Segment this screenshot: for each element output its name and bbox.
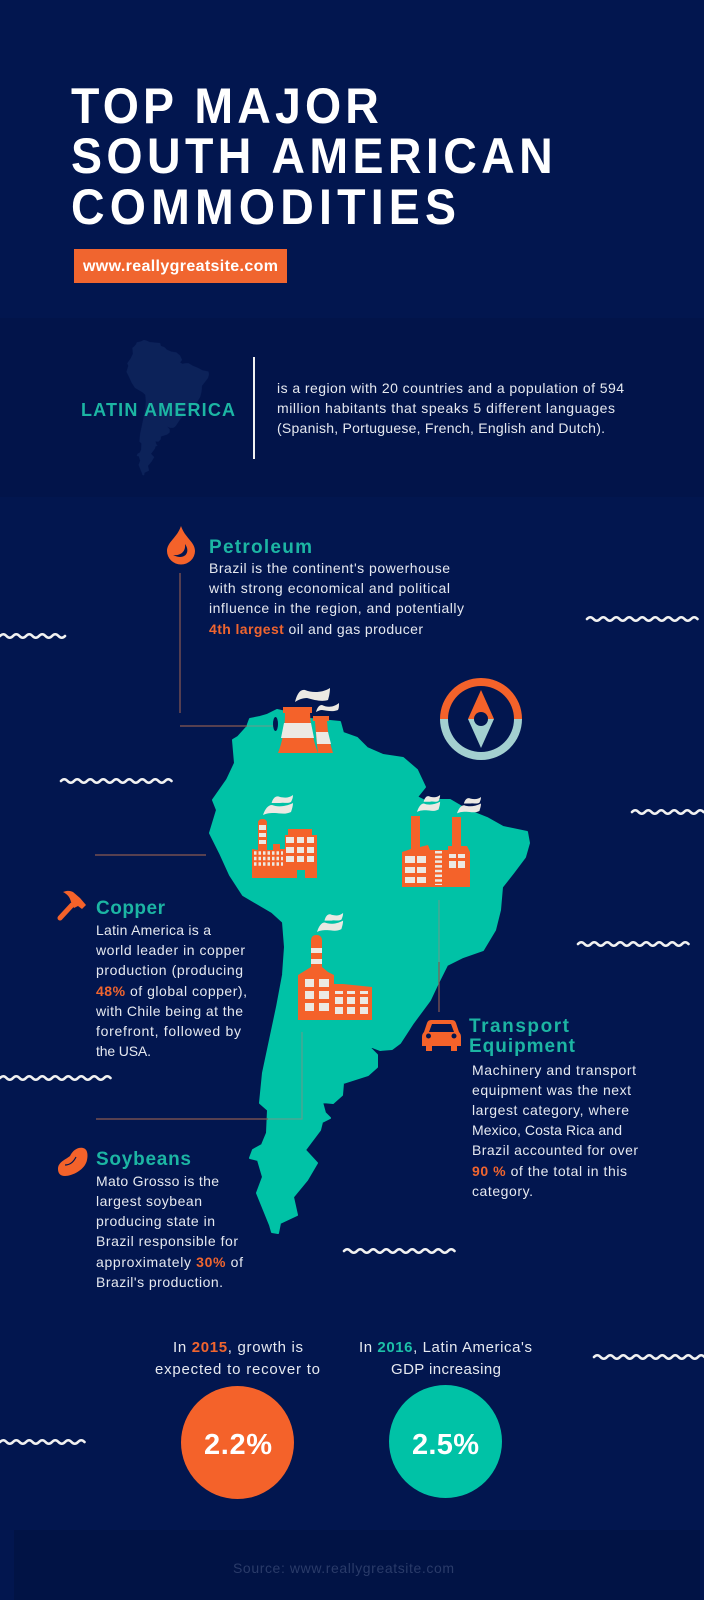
petroleum text: influence in the region, and potentially (209, 600, 464, 616)
copper text: production (producing (96, 962, 243, 978)
heading: soybeans: Soybeans (96, 1149, 191, 1170)
intro text: (Spanish, Portuguese, French, English and Dutch). (277, 420, 605, 436)
panel: latin america intro (0, 318, 704, 497)
decorative waves (0, 617, 704, 1444)
soybeans text: Brazil's production. (96, 1274, 223, 1290)
caption: In 2015, growth is (173, 1339, 303, 1356)
transport text: largest category, where (472, 1102, 629, 1118)
factory: east (402, 795, 481, 887)
footer source: Source: www.reallygreatsite.com (233, 1560, 454, 1576)
copper text: 48% of global copper), (96, 983, 247, 999)
petroleum block (167, 526, 464, 637)
soybeans text: Mato Grosso is the (96, 1173, 219, 1189)
soybeans text: producing state in (96, 1213, 215, 1229)
icon: compass (440, 678, 522, 760)
petroleum text (208, 560, 464, 637)
factory: power plant (278, 688, 339, 753)
title (71, 78, 553, 235)
ghost map (126, 340, 209, 475)
map of south america (210, 710, 529, 1233)
petroleum text: 4th largest oil and gas producer (209, 621, 423, 637)
lake maracaibo (273, 717, 278, 731)
caption: GDP increasing (391, 1361, 501, 1378)
icon: car (422, 1020, 461, 1051)
title: SOUTH AMERICAN (71, 128, 553, 184)
icon: bean (58, 1148, 88, 1176)
transport text (472, 1062, 638, 1199)
website badge: www.reallygreatsite.com (82, 258, 278, 275)
website badge (74, 249, 287, 283)
copper text: with Chile being at the (95, 1003, 243, 1019)
heading: transport equipment: Equipment (469, 1036, 576, 1057)
caption: In 2016, Latin America's (359, 1339, 532, 1356)
transport block (422, 1016, 638, 1199)
transport text: Brazil accounted for over (472, 1142, 638, 1158)
factory: west (252, 795, 317, 878)
copper text: the USA. (96, 1043, 151, 1059)
heading: petroleum: Petroleum (209, 537, 312, 558)
heading: copper: Copper (96, 898, 166, 919)
caption (359, 1339, 532, 1378)
transport text: category. (472, 1183, 533, 1199)
soybeans text: largest soybean (96, 1193, 202, 1209)
icon: oil drop (167, 526, 195, 564)
stat: 2015 growth (155, 1339, 320, 1499)
intro text: million habitants that speaks 5 different languages (277, 400, 615, 416)
caption (155, 1339, 320, 1378)
footer source (14, 1530, 700, 1600)
stat: 2016 gdp (359, 1339, 532, 1498)
copper text: Latin America is a (96, 922, 211, 938)
connector lines (95, 573, 439, 1119)
caption: expected to recover to (155, 1361, 320, 1378)
heading: transport equipment (469, 1016, 576, 1057)
petroleum text: Brazil is the continent's powerhouse (209, 560, 450, 576)
soybeans text (96, 1173, 243, 1290)
value: 2.2% (204, 1429, 272, 1461)
transport text: 90 % of the total in this (472, 1163, 627, 1179)
icon: hammer (60, 891, 86, 918)
transport text: Mexico, Costa Rica and (472, 1122, 622, 1138)
copper text: world leader in copper (95, 942, 245, 958)
intro text (277, 380, 624, 436)
petroleum text: with strong economical and political (208, 580, 450, 596)
heading: transport equipment: Transport (469, 1016, 570, 1037)
factory: central (298, 913, 372, 1020)
intro text: is a region with 20 countries and a population of 594 (277, 380, 624, 396)
title: TOP MAJOR (71, 78, 379, 134)
copper text (95, 922, 247, 1059)
transport text: equipment was the next (472, 1082, 631, 1098)
title: COMMODITIES (71, 179, 456, 235)
value: 2.5% (412, 1429, 479, 1461)
transport text: Machinery and transport (472, 1062, 636, 1078)
soybeans block (58, 1148, 243, 1290)
copper block (60, 891, 247, 1059)
copper text: forefront, followed by (96, 1023, 241, 1039)
soybeans text: Brazil responsible for (96, 1233, 238, 1249)
latin america label: LATIN AMERICA (81, 400, 235, 420)
soybeans text: approximately 30% of (96, 1254, 243, 1270)
